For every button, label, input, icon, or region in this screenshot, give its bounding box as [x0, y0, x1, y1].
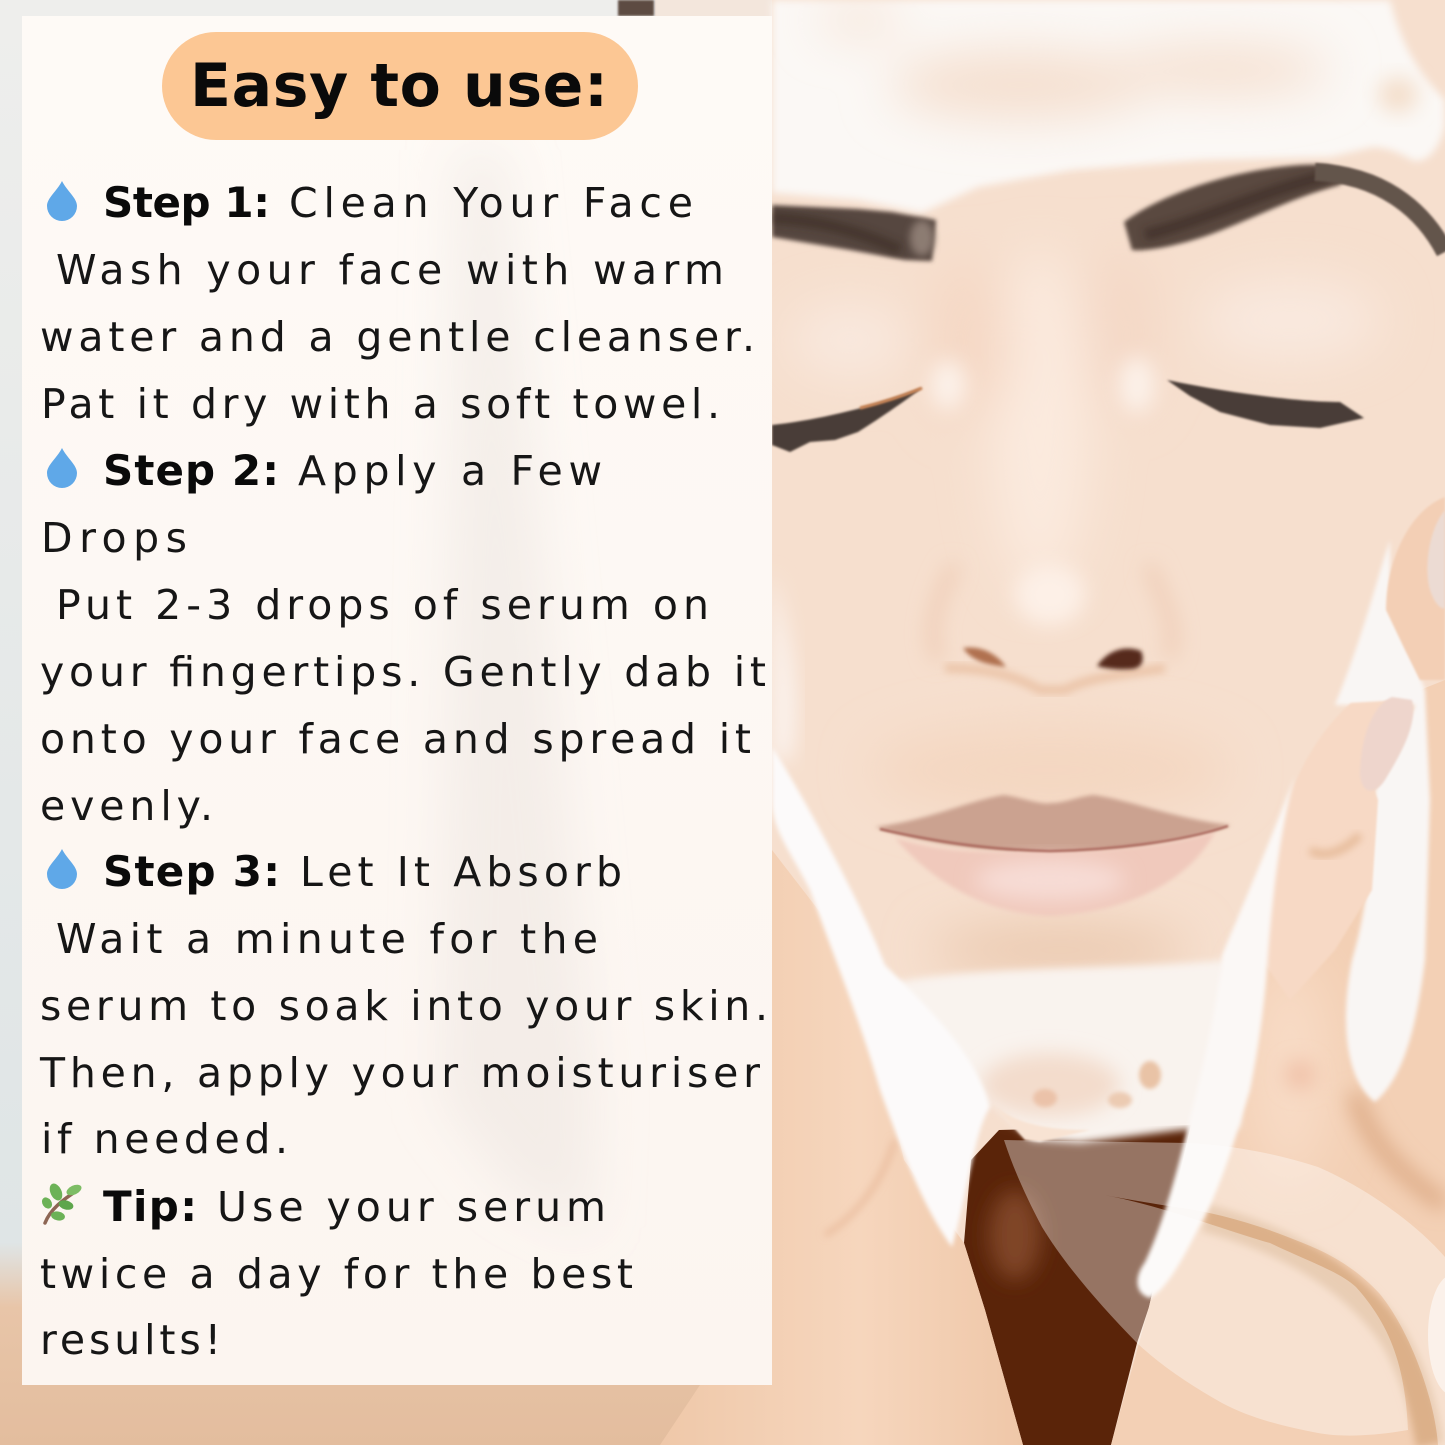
background top right strip	[655, 0, 775, 16]
step 3	[39, 847, 768, 1163]
step 2 body: Put 2-3 drops of serum on	[56, 581, 709, 629]
left eyebrow	[772, 205, 936, 261]
panel ghost figure	[440, 150, 595, 1230]
step 2	[40, 446, 766, 830]
dark neck shadow	[964, 1125, 1192, 1445]
icon: water drop	[47, 181, 77, 221]
right hand knuckle and wrist shadow	[1286, 1061, 1445, 1205]
left cheek foam	[772, 570, 795, 760]
face skin	[772, 0, 1445, 1445]
tip	[40, 1182, 633, 1364]
step 1 label: Step 1:	[103, 178, 270, 227]
left hand creases	[825, 1140, 895, 1235]
tip body: results!	[40, 1316, 221, 1364]
icon: water drop	[47, 849, 77, 889]
step 3 body: Wait a minute for the	[56, 915, 598, 963]
lips	[875, 795, 1231, 916]
tip body: Use your serum	[217, 1183, 606, 1231]
right finger upper	[1386, 497, 1445, 680]
step 1 body: Wash your face with warm	[56, 246, 724, 294]
step 2 body: your fingertips. Gently dab it	[40, 648, 766, 696]
tip label: Tip:	[103, 1182, 197, 1231]
band shadow under logo	[1205, 1218, 1430, 1445]
tip body	[40, 1183, 633, 1364]
step 2 body: evenly.	[40, 782, 213, 830]
photo background behind panel	[0, 0, 780, 1445]
finger knuckle shadow	[1310, 835, 1360, 854]
inner eye highlights	[930, 357, 1155, 413]
right hand palm highlight	[1250, 960, 1330, 1180]
forehead foam	[772, 0, 1445, 213]
foam peach patches	[820, 6, 1330, 119]
right hand foam lower	[1137, 775, 1295, 1298]
nose	[933, 565, 1172, 690]
cheek and nose shading	[790, 250, 1380, 972]
right hand and forearm	[1111, 680, 1445, 1445]
left eye lashes	[772, 388, 922, 452]
left side foam	[772, 747, 990, 1247]
fingernail lower	[1360, 697, 1413, 791]
step 3 body: if needed.	[41, 1115, 288, 1163]
step 3 label: Step 3:	[103, 847, 280, 896]
step 2 label: Step 2:	[103, 446, 279, 495]
icon: herb sprig	[40, 1182, 83, 1223]
right eye lashes	[1167, 380, 1373, 428]
step 1 heading: Clean Your Face	[289, 179, 693, 227]
right eyebrow	[1124, 165, 1445, 252]
step 3 body: serum to soak into your skin.	[40, 982, 768, 1030]
step 2 body: onto your face and spread it	[40, 715, 751, 763]
step 2 body	[40, 581, 766, 830]
step 1 body	[40, 246, 755, 428]
title text: Easy to use:	[190, 51, 608, 121]
step 1 body: Pat it dry with a soft towel.	[41, 380, 720, 428]
panel: instructions	[22, 16, 772, 1385]
step 1	[40, 178, 755, 428]
chin foam	[885, 960, 1240, 1143]
step 1 body: water and a gentle cleanser.	[40, 313, 755, 361]
step 3 heading: Let It Absorb	[300, 848, 622, 896]
step 2 heading: Apply a Few	[298, 447, 602, 495]
neck warm glow	[989, 1190, 1041, 1280]
icon: water drop	[47, 448, 77, 488]
step 3 body: Then, apply your moisturiser	[39, 1049, 760, 1097]
left hand	[660, 850, 1023, 1445]
step 2 heading	[41, 447, 602, 562]
title pill	[162, 32, 638, 140]
hair at top edge	[618, 0, 654, 16]
step 3 body	[39, 915, 768, 1163]
fingernail upper	[1427, 510, 1445, 608]
foam peach patch right	[1378, 77, 1418, 113]
tip body: twice a day for the best	[40, 1250, 633, 1298]
chin skin under foam	[995, 1107, 1090, 1142]
logo watermark	[1004, 1140, 1445, 1445]
right finger lower	[1262, 700, 1400, 1000]
logo watermark small leaf	[1428, 1275, 1445, 1395]
step 2 heading: Drops	[41, 514, 187, 562]
right hand foam upper	[1335, 540, 1430, 1102]
